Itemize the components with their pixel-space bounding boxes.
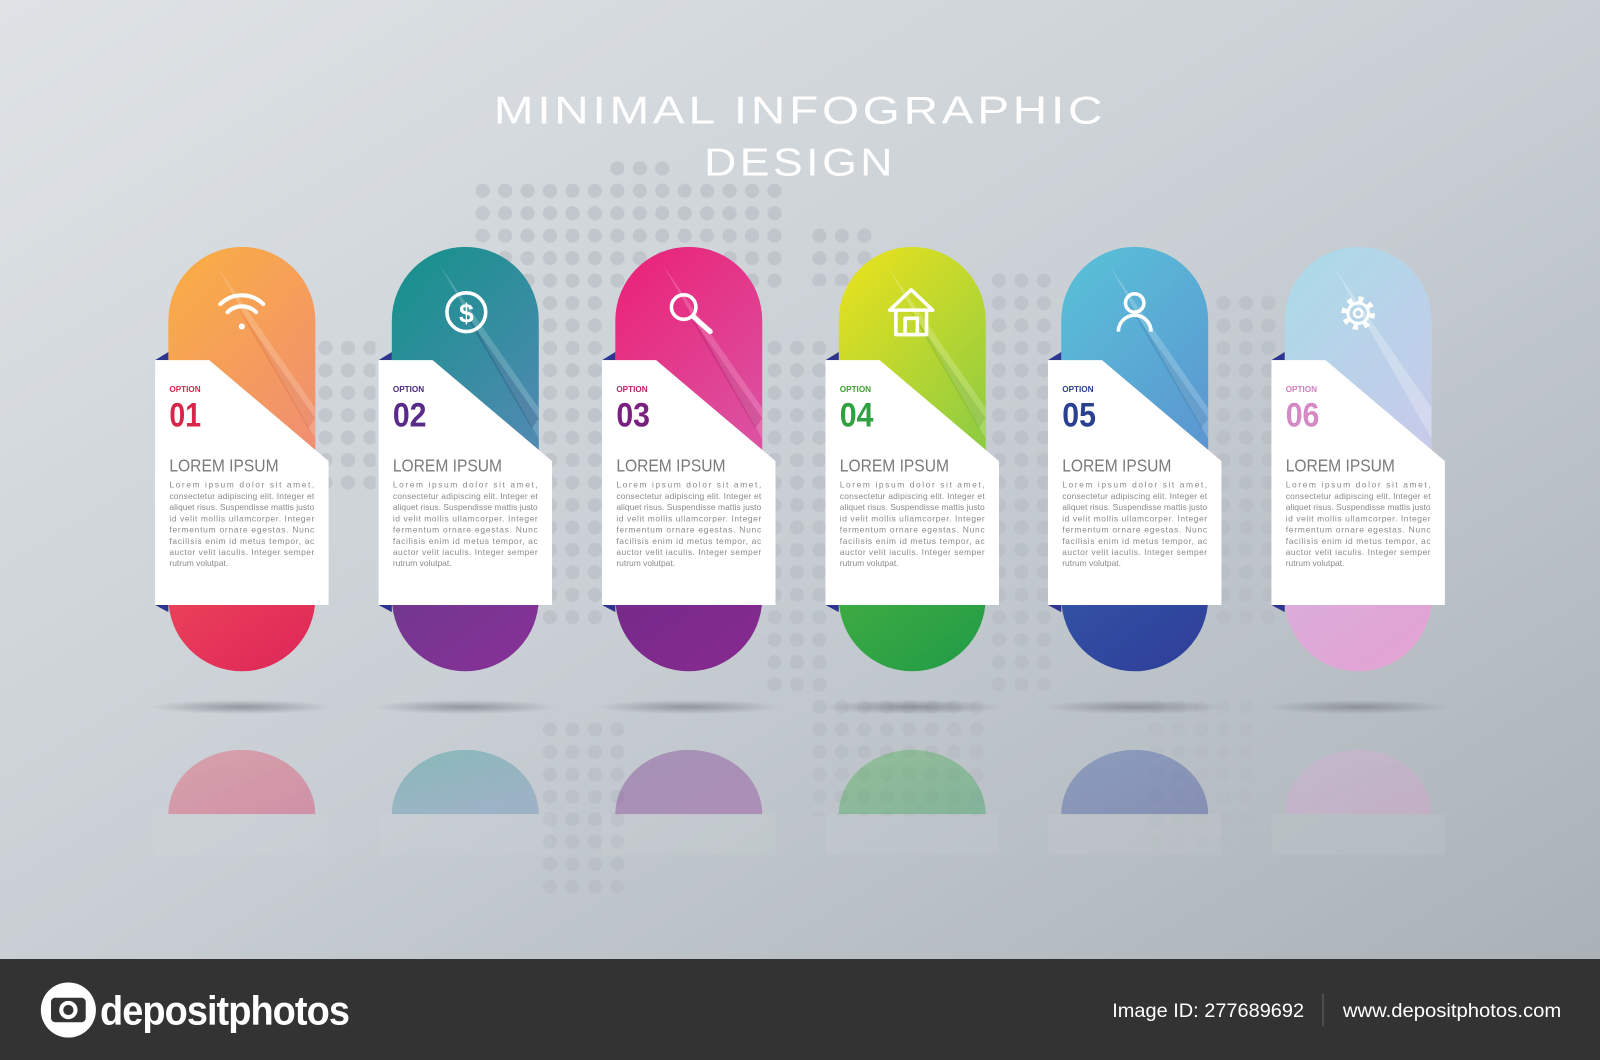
option card 03: OPTION (616, 385, 648, 394)
icon: dollar coin: $ (459, 298, 474, 328)
option card 05: OPTION (1062, 385, 1094, 394)
option card 03 (602, 246, 776, 814)
option card 04 (826, 246, 999, 814)
option card 01: LOREM IPSUM (169, 455, 279, 475)
icon: gear (1344, 299, 1372, 327)
option card 06: OPTION (1286, 385, 1317, 394)
option card 04: LOREM IPSUM (840, 455, 949, 475)
option card 05: 05 (1062, 396, 1096, 434)
icon: user (1118, 294, 1151, 332)
title (494, 89, 1106, 184)
icon: wifi (220, 295, 263, 330)
icon: magnifier (671, 295, 710, 332)
title: MINIMAL INFOGRAPHIC (494, 89, 1106, 132)
icon: dollar coin (447, 293, 486, 332)
option card 06: LOREM IPSUM (1286, 455, 1395, 475)
footer bar (0, 959, 1600, 1060)
option card 06 (1271, 247, 1445, 814)
option card 04: 04 (840, 396, 874, 434)
option card 02 (378, 246, 552, 814)
option card 02: OPTION (393, 385, 424, 394)
option card 05: LOREM IPSUM (1062, 455, 1171, 475)
option card 01: 01 (169, 396, 201, 434)
footer text: Image ID: 277689692 (1112, 1000, 1304, 1022)
option card 06: 06 (1286, 396, 1319, 434)
option card 05 (1048, 247, 1222, 814)
footer bar: www.depositphotos.com (1342, 1000, 1561, 1022)
title: DESIGN (704, 141, 896, 184)
option card 02: 02 (393, 396, 427, 434)
option card 01: OPTION (169, 385, 201, 394)
option card 04: OPTION (840, 385, 871, 394)
option card 03: 03 (616, 396, 650, 434)
footer logo (41, 982, 349, 1038)
option card 02: LOREM IPSUM (393, 455, 502, 475)
dotted world map background (314, 157, 1280, 898)
option card 03: LOREM IPSUM (616, 455, 726, 475)
icon: house (890, 290, 933, 335)
option card 01 (155, 247, 329, 814)
footer logo: depositphotos (100, 987, 349, 1033)
